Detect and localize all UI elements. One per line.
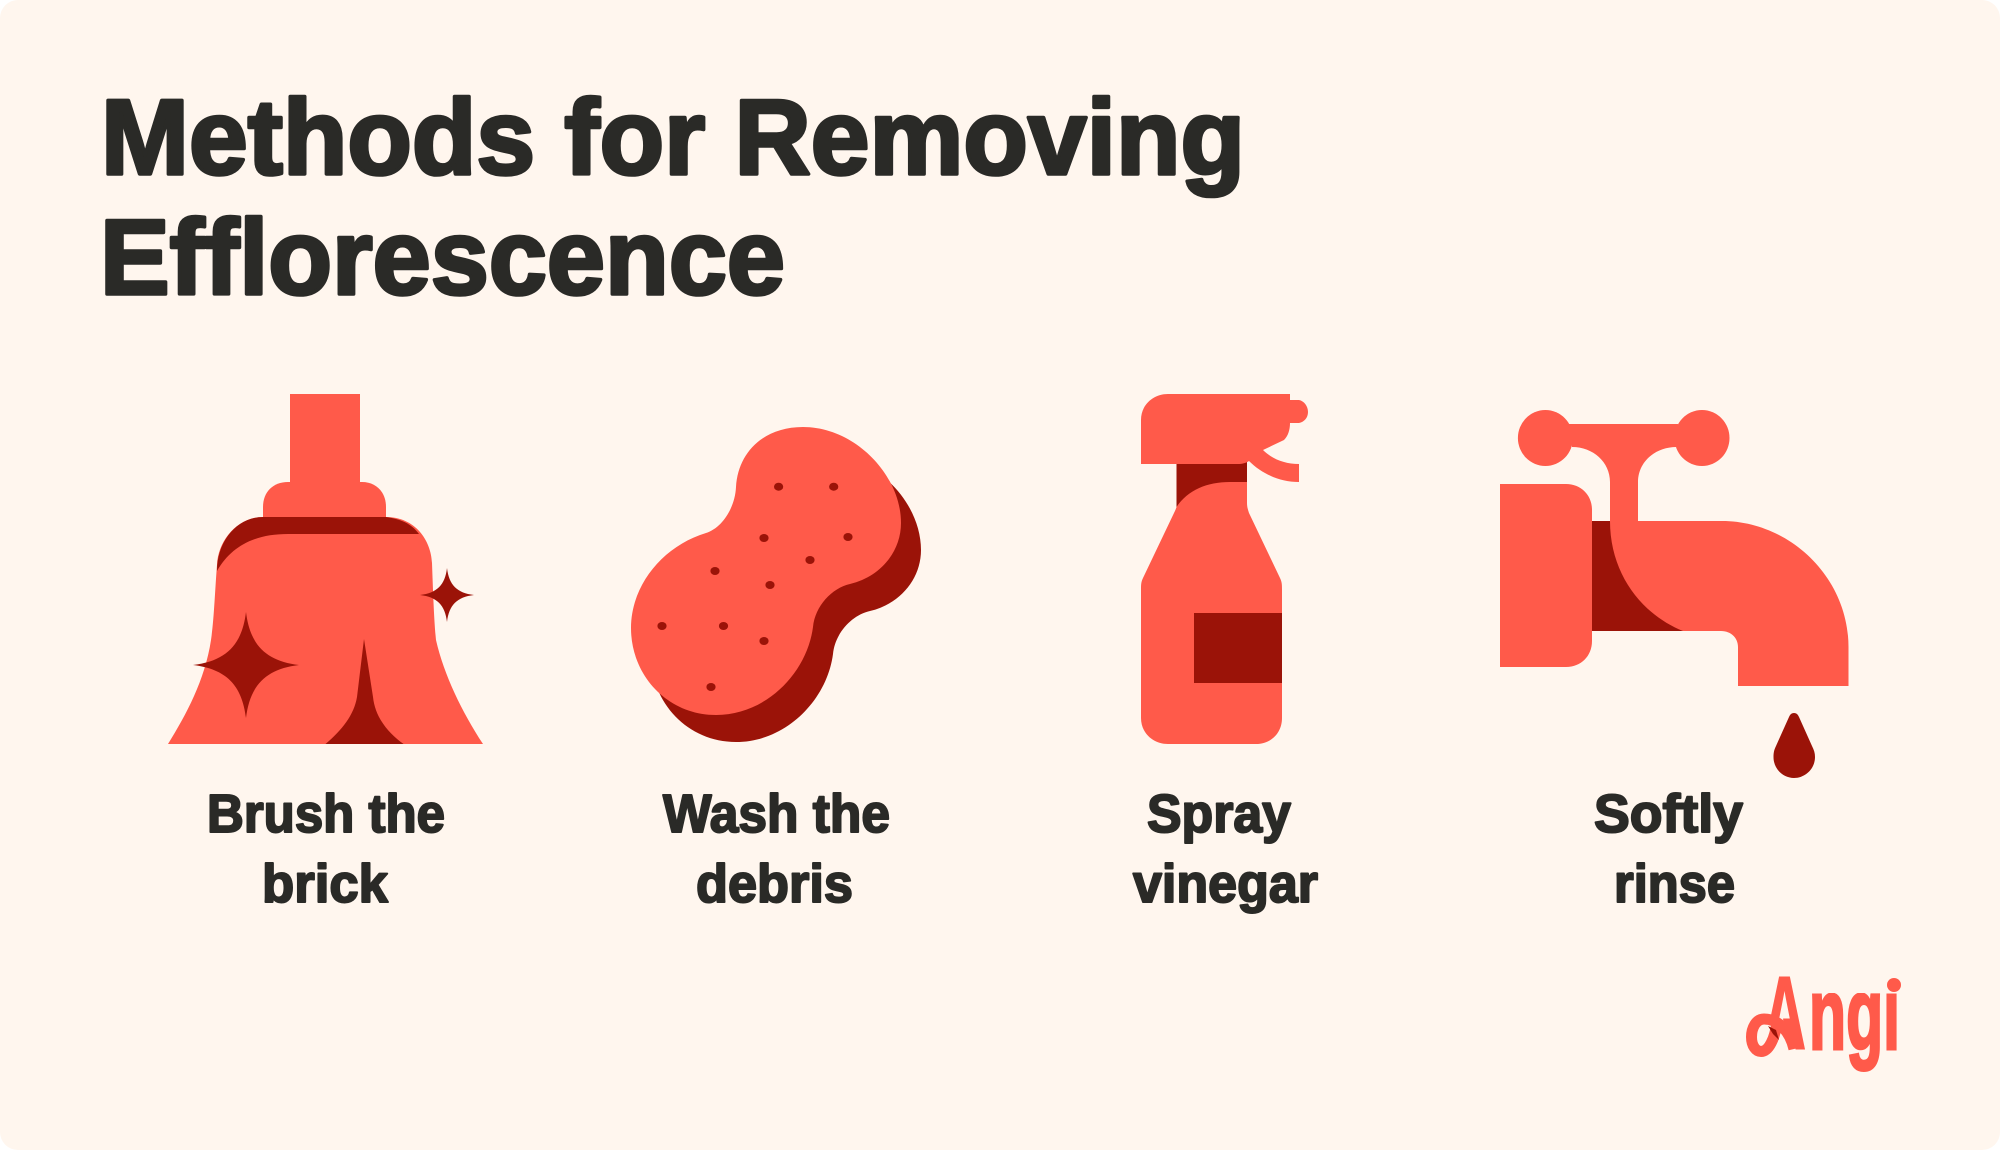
label: spray vinegar xyxy=(1133,784,1318,914)
title: Efflorescence xyxy=(100,197,785,317)
label: wash the debris: debris xyxy=(696,854,853,914)
label: spray vinegar: Spray xyxy=(1147,784,1291,844)
logo: Angi: ngi xyxy=(1809,957,1900,1071)
label: brush the brick: Brush the xyxy=(207,784,445,844)
label: softly rinse: Softly xyxy=(1594,784,1743,844)
label: softly rinse xyxy=(1594,784,1743,914)
logo: Angi xyxy=(1746,976,1901,1072)
label: softly rinse: rinse xyxy=(1614,854,1735,914)
icon: spray bottle xyxy=(1141,394,1308,744)
icon: broom xyxy=(168,394,483,744)
logo: Angi: A xyxy=(1763,956,1806,1072)
icon: sponge xyxy=(631,427,921,742)
title: Methods for Removing xyxy=(101,77,1245,197)
label: brush the brick xyxy=(207,784,445,914)
label: brush the brick: brick xyxy=(262,854,389,914)
label: spray vinegar: vinegar xyxy=(1133,854,1318,914)
label: wash the debris xyxy=(663,784,890,914)
label: wash the debris: Wash the xyxy=(663,784,890,844)
title xyxy=(100,77,1245,317)
icon: faucet with drop xyxy=(1500,410,1848,778)
